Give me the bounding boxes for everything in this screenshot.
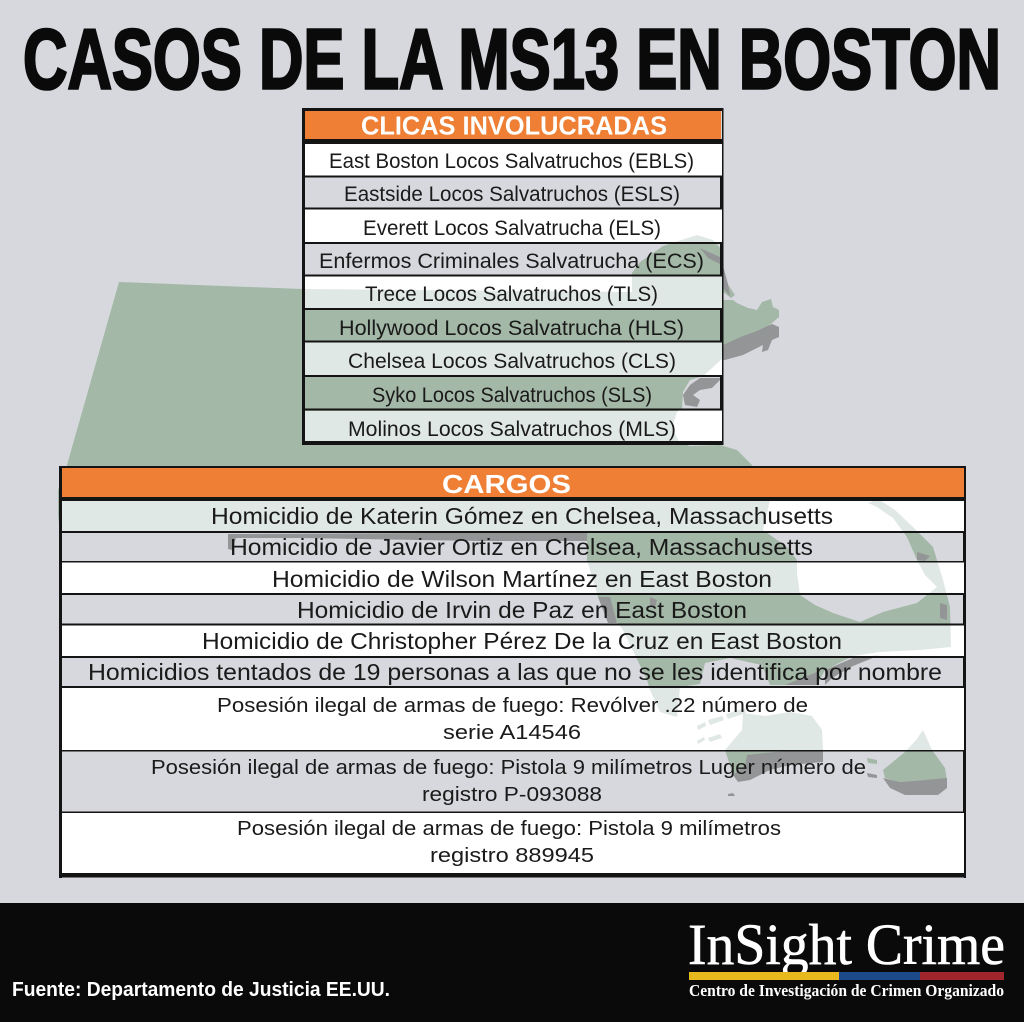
list of charges: Homicidio de Javier Ortiz en Chelsea, Massachusetts — [230, 534, 813, 560]
list of clicas: Molinos Locos Salvatruchos (MLS) — [348, 418, 676, 441]
logo: InSight Crime: Centro de Investigación de Crimen Organizado — [689, 981, 1004, 1000]
list of clicas — [319, 150, 704, 441]
list of clicas: Enfermos Criminales Salvatrucha (ECS) — [319, 250, 704, 273]
panel: cargos — [59, 466, 966, 878]
list of charges: Posesión ilegal de armas de fuego: Pistola 9 milímetros — [237, 818, 781, 840]
panel: clicas involucradas — [302, 108, 724, 445]
list of charges: Homicidio de Wilson Martínez en East Boston — [272, 566, 772, 592]
footer band — [0, 903, 1024, 1022]
list of clicas: Chelsea Locos Salvatruchos (CLS) — [348, 350, 676, 373]
list of charges: Homicidios tentados de 19 personas a las que no se les identifica por nombre — [88, 659, 942, 685]
list of charges: registro P-093088 — [422, 784, 602, 806]
list of charges: Posesión ilegal de armas de fuego: Revólver .22 número de — [217, 695, 808, 717]
heading: cargos: CARGOS — [442, 469, 571, 499]
list of clicas: Trece Locos Salvatruchos (TLS) — [365, 283, 658, 306]
list of clicas: East Boston Locos Salvatruchos (EBLS) — [329, 150, 694, 173]
background map of Massachusetts — [58, 235, 951, 796]
list of charges: Homicidio de Katerin Gómez en Chelsea, Massachusetts — [211, 503, 833, 529]
heading: clicas: CLICAS INVOLUCRADAS — [361, 110, 667, 140]
heading: cargos — [62, 468, 964, 499]
list of charges: registro 889945 — [430, 845, 594, 867]
source note: Fuente: Departamento de Justicia EE.UU. — [12, 979, 390, 1001]
list of clicas: Syko Locos Salvatruchos (SLS) — [372, 384, 652, 407]
logo: InSight Crime: InSight Crime — [688, 912, 1005, 977]
list of charges: Posesión ilegal de armas de fuego: Pistola 9 milímetros Luger número de — [151, 757, 866, 779]
list of charges: serie A14546 — [443, 722, 581, 744]
list of clicas: Everett Locos Salvatrucha (ELS) — [363, 217, 661, 240]
list of charges: Homicidio de Christopher Pérez De la Cruz en East Boston — [202, 628, 842, 654]
list of clicas: Hollywood Locos Salvatrucha (HLS) — [339, 317, 684, 340]
list of clicas: Eastside Locos Salvatruchos (ESLS) — [344, 183, 680, 206]
list of charges — [88, 503, 942, 867]
list of charges: Homicidio de Irvin de Paz en East Boston — [297, 597, 747, 623]
